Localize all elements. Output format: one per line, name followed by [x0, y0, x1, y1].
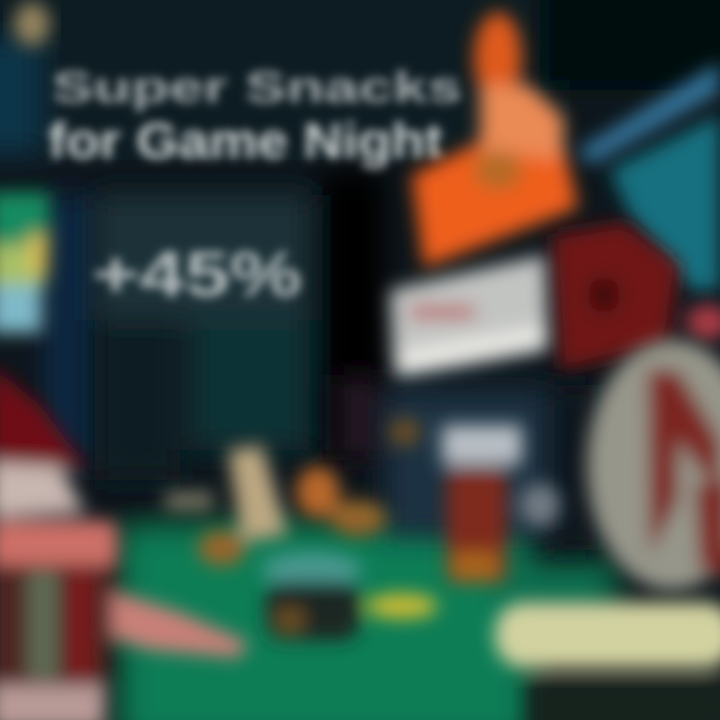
- icon: snacks in centre: [165, 445, 386, 566]
- title: Super Snacks: [52, 63, 462, 112]
- lower stand: [335, 375, 595, 550]
- icon: teal bowl: [262, 552, 438, 640]
- title: [48, 63, 462, 169]
- panel: red box: [552, 222, 720, 372]
- icon: small top-left glow: [14, 2, 50, 46]
- icon: orange hand and tag: [412, 12, 578, 268]
- icon: cup with red drink: [389, 418, 560, 583]
- panel: blue streaks right: [578, 62, 720, 290]
- panel: central dark teal board: [95, 170, 385, 480]
- statistic text: +45%: [92, 238, 302, 310]
- icon: popcorn bucket: [0, 365, 248, 720]
- panel: white card: [390, 255, 548, 378]
- icon: round sign with red letter: [587, 340, 720, 590]
- icon: cream plate: [495, 602, 720, 720]
- title: for Game Night: [48, 113, 443, 169]
- panel: colorful stack left: [0, 192, 50, 333]
